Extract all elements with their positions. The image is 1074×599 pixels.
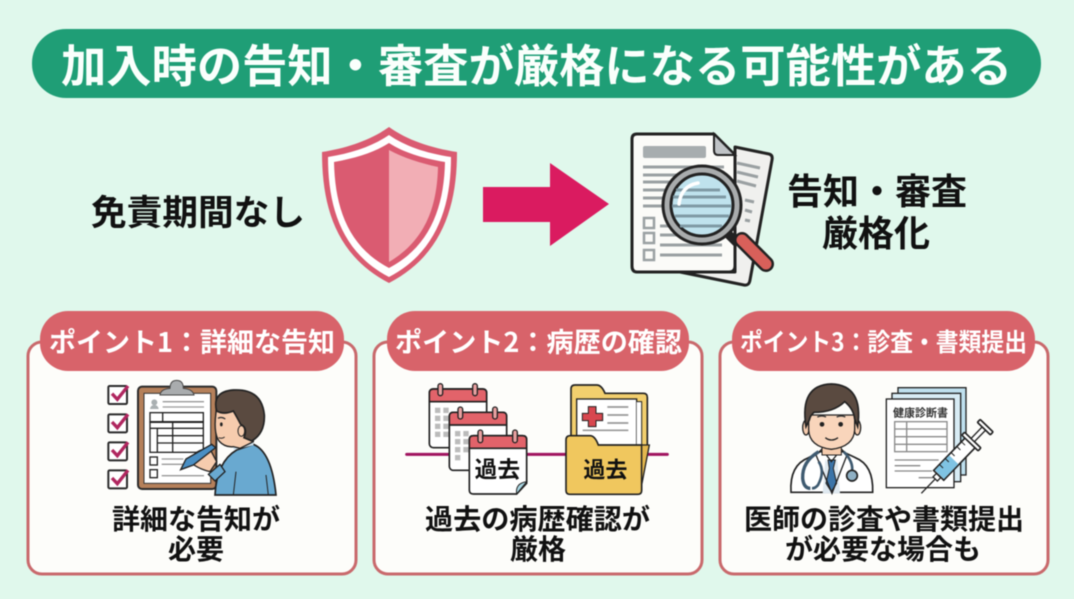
caption: 必要 [168, 528, 224, 568]
doctor [791, 384, 873, 493]
caption: 詳細な告知が [112, 498, 280, 538]
icon: documents and magnifying glass [632, 134, 772, 285]
syringe [913, 418, 995, 501]
arrow [483, 163, 609, 246]
pill heading [387, 311, 689, 371]
documents [886, 388, 966, 488]
card [374, 342, 702, 574]
person [215, 444, 276, 495]
calendar front: 過去 [475, 451, 520, 484]
front page [632, 134, 735, 272]
card [720, 342, 1048, 574]
folder: 過去 [583, 453, 627, 485]
icon: doctor, documents, syringe [791, 384, 995, 501]
back page [680, 147, 772, 285]
caption: が必要な場合も [785, 528, 981, 568]
icon: clipboard and person [108, 380, 276, 495]
pill heading: ポイント3：診査・書類提出 [740, 323, 1027, 359]
caption: 過去の病歴確認が [425, 498, 650, 538]
caption: 厳格 [510, 528, 566, 568]
icon: calendars and folder [407, 384, 667, 494]
magnifier lens [663, 166, 741, 244]
panel: point 1 [28, 311, 356, 574]
pill heading [40, 311, 344, 371]
timeline [407, 450, 667, 459]
label: no waiting period: 免責期間なし [91, 185, 305, 236]
label: stricter disclosure and review: 厳格化 [822, 205, 930, 257]
pill heading: ポイント2：病歴の確認 [395, 321, 682, 360]
documents: 健康診断書 [893, 404, 948, 420]
pill heading: ポイント1：詳細な告知 [49, 321, 335, 360]
calendar middle [449, 407, 507, 470]
panel: point 3 [720, 311, 1048, 574]
label: stricter disclosure and review: 告知・審査 [787, 163, 967, 215]
checkboxes [108, 386, 127, 488]
caption [425, 498, 650, 568]
calendar back [429, 384, 487, 448]
pill heading [732, 311, 1035, 371]
panel: point 2 [374, 311, 702, 574]
hand and pen [190, 449, 217, 472]
title banner: 加入時の告知・審査が厳格になる可能性がある [61, 30, 1012, 95]
clipboard [138, 387, 216, 489]
calendar front [469, 430, 527, 494]
card [28, 342, 356, 574]
caption [744, 498, 1024, 568]
caption: 医師の診査や書類提出 [744, 498, 1024, 538]
icon: shield [322, 127, 457, 283]
label: stricter disclosure and review [787, 163, 967, 257]
magnifier handle [727, 233, 737, 243]
folder [566, 385, 649, 494]
caption [112, 498, 280, 568]
